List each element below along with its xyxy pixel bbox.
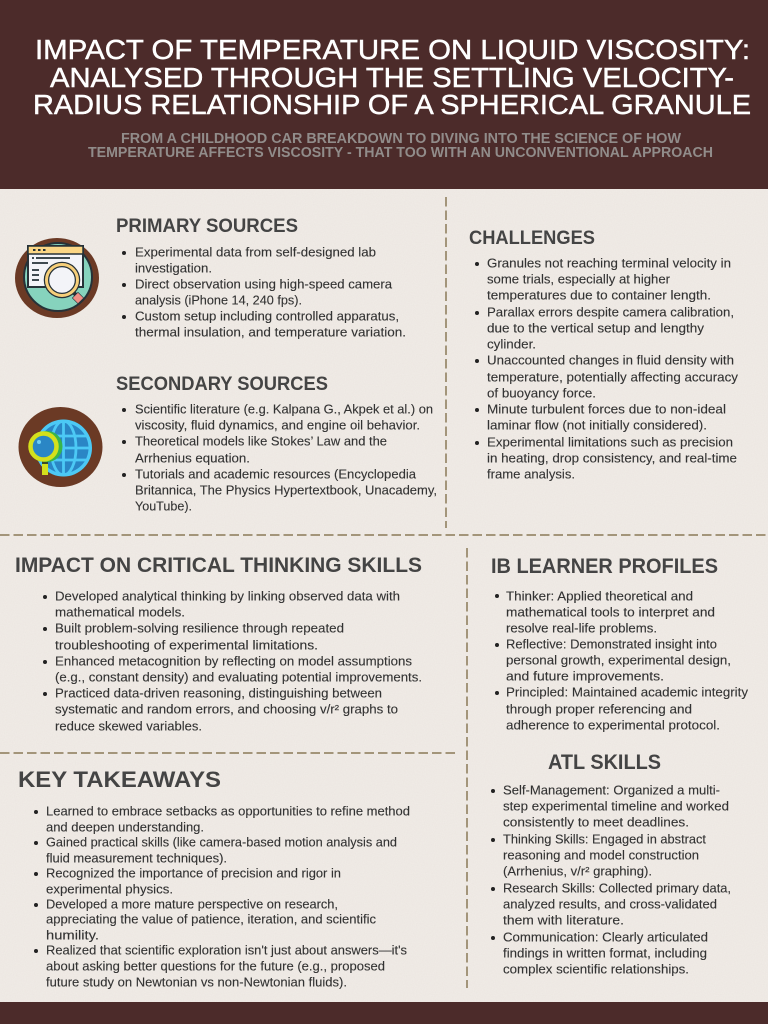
panel: challenges: [469, 227, 738, 482]
list: critical thinking: [43, 588, 422, 734]
list: IB learner profiles: mathematical tools to interpret and: [506, 604, 715, 620]
list: critical thinking: Built problem-solving resilience through repeated: [55, 620, 344, 636]
list: challenges: in heating, drop consistency, and real-time: [487, 450, 737, 466]
list: key takeaways: future study on Newtonian vs non-Newtonian fluids).: [46, 974, 347, 990]
list: challenges: temperatures due to container length.: [487, 288, 711, 302]
list: secondary sources: Arrhenius equation.: [135, 450, 250, 466]
list: ATL skills: Self-Management: Organized a multi-: [503, 782, 720, 798]
list: challenges: Unaccounted changes in fluid density with: [487, 352, 734, 368]
list: challenges: temperature, potentially affecting accuracy: [487, 370, 738, 384]
title: RADIUS RELATIONSHIP OF A SPHERICAL GRANULE: [33, 89, 751, 120]
title: [33, 34, 751, 120]
list: key takeaways: about asking better questions for the future (e.g., proposed: [46, 958, 385, 974]
list: challenges: Granules not reaching terminal velocity in: [487, 256, 731, 270]
list: ATL skills: findings in written format, including: [503, 946, 707, 960]
list: ATL skills: Communication: Clearly articulated: [503, 930, 708, 944]
list: key takeaways: humility.: [46, 928, 99, 942]
panel: secondary sources: [116, 373, 437, 514]
list: key takeaways: Recognized the importance of precision and rigor in: [46, 866, 341, 880]
list: critical thinking: troubleshooting of experimental limitations.: [55, 638, 318, 652]
list: IB learner profiles: adherence to experimental protocol.: [506, 718, 720, 732]
list: ATL skills: reasoning and model construction: [503, 848, 699, 862]
list: IB learner profiles: Reflective: Demonstrated insight into: [506, 636, 717, 652]
list: key takeaways: Developed a more mature perspective on research,: [46, 896, 338, 912]
heading: key takeaways: KEY TAKEAWAYS: [18, 767, 221, 792]
icon: globe with magnifying glass: [18, 407, 102, 487]
list: ATL skills: them with literature.: [503, 912, 624, 928]
heading: ATL skills: ATL SKILLS: [548, 750, 661, 774]
list: primary sources: Direct observation using high-speed camera: [135, 276, 393, 292]
list: primary sources: Experimental data from self-designed lab: [135, 244, 376, 260]
list: key takeaways: fluid measurement techniques).: [46, 850, 227, 866]
list: primary sources: [122, 244, 406, 340]
list: IB learner profiles: Thinker: Applied theoretical and: [506, 588, 693, 604]
heading: critical thinking: IMPACT ON CRITICAL THINKING SKILLS: [15, 553, 422, 577]
list: challenges: Parallax errors despite camera calibration,: [487, 304, 734, 320]
list: challenges: [475, 256, 738, 482]
list: key takeaways: Realized that scientific exploration isn't just about answers—it's: [46, 942, 407, 958]
subtitle: TEMPERATURE AFFECTS VISCOSITY - THAT TOO WITH AN UNCONVENTIONAL APPROACH: [88, 145, 713, 161]
list: IB learner profiles: Principled: Maintained academic integrity: [506, 684, 748, 700]
list: secondary sources: Theoretical models like Stokes’ Law and the: [135, 434, 387, 448]
list: IB learner profiles: resolve real-life problems.: [506, 620, 657, 636]
list: key takeaways: Gained practical skills (like camera-based motion analysis and: [46, 834, 397, 850]
list: challenges: laminar flow (not initially considered).: [487, 418, 707, 432]
list: IB learner profiles: through proper referencing and: [506, 702, 692, 716]
heading: primary sources: PRIMARY SOURCES: [116, 215, 298, 237]
list: key takeaways: experimental physics.: [46, 882, 173, 896]
list: critical thinking: mathematical models.: [55, 604, 185, 620]
list: IB learner profiles: personal growth, experimental design,: [506, 652, 731, 668]
list: ATL skills: Thinking Skills: Engaged in abstract: [503, 832, 706, 846]
footer band: [0, 1002, 768, 1024]
list: IB learner profiles: [495, 588, 748, 732]
subtitle: [88, 131, 713, 161]
panel: impact on critical thinking skills: [15, 553, 422, 734]
title: IMPACT OF TEMPERATURE ON LIQUID VISCOSITY:: [35, 34, 750, 65]
list: critical thinking: Developed analytical thinking by linking observed data with: [55, 588, 400, 604]
list: key takeaways: appreciating the value of patience, iteration, and scientific: [46, 912, 376, 926]
list: secondary sources: Tutorials and academic resources (Encyclopedia: [135, 466, 417, 482]
list: critical thinking: reduce skewed variables.: [55, 718, 202, 734]
list: key takeaways: [34, 804, 410, 990]
list: primary sources: investigation.: [135, 260, 212, 276]
panel: key takeaways: [18, 767, 410, 990]
list: ATL skills: step experimental timeline and worked: [503, 798, 729, 814]
list: secondary sources: [122, 402, 437, 514]
list: secondary sources: YouTube).: [135, 498, 192, 514]
heading: challenges: CHALLENGES: [469, 227, 595, 249]
list: ATL skills: Research Skills: Collected primary data,: [503, 880, 731, 896]
list: secondary sources: viscosity, fluid dynamics, and engine oil behavior.: [135, 418, 420, 432]
list: primary sources: Custom setup including controlled apparatus,: [135, 308, 399, 324]
list: critical thinking: systematic and random errors, and choosing v/r² graphs to: [55, 702, 398, 716]
list: ATL skills: (Arrhenius, v/r² graphing).: [503, 864, 652, 878]
panel: primary sources: [116, 215, 406, 340]
list: critical thinking: (e.g., constant density) and evaluating potential improvements.: [55, 670, 422, 684]
header band: [0, 0, 768, 189]
list: primary sources: analysis (iPhone 14, 240 fps).: [135, 292, 302, 308]
panel: ATL skills: [491, 750, 731, 976]
list: key takeaways: Learned to embrace setbacks as opportunities to refine method: [46, 804, 410, 818]
list: ATL skills: complex scientific relationships.: [503, 962, 689, 976]
list: critical thinking: Practiced data-driven reasoning, distinguishing between: [55, 686, 382, 700]
heading: IB learner profiles: IB LEARNER PROFILES: [491, 554, 718, 578]
list: critical thinking: Enhanced metacognition by reflecting on model assumptions: [55, 654, 412, 668]
list: ATL skills: [491, 782, 731, 976]
list: ATL skills: analyzed results, and cross-validated: [503, 896, 717, 912]
list: primary sources: thermal insulation, and temperature variation.: [135, 324, 406, 340]
panel: IB learner profiles: [491, 554, 748, 732]
list: secondary sources: Scientific literature (e.g. Kalpana G., Akpek et al.) on: [135, 402, 433, 416]
list: challenges: due to the vertical setup and lengthy: [487, 320, 704, 336]
list: challenges: frame analysis.: [487, 466, 575, 482]
heading: secondary sources: SECONDARY SOURCES: [116, 373, 328, 395]
title: ANALYSED THROUGH THE SETTLING VELOCITY-: [50, 62, 734, 93]
list: challenges: Experimental limitations such as precision: [487, 434, 733, 450]
list: ATL skills: consistently to meet deadlines.: [503, 814, 689, 830]
list: secondary sources: Britannica, The Physics Hypertextbook, Unacademy,: [135, 482, 437, 498]
list: challenges: Minute turbulent forces due to non-ideal: [487, 402, 726, 416]
list: challenges: cylinder.: [487, 336, 536, 352]
subtitle: FROM A CHILDHOOD CAR BREAKDOWN TO DIVING INTO THE SCIENCE OF HOW: [121, 131, 681, 147]
list: IB learner profiles: and future improvements.: [506, 668, 664, 684]
list: challenges: of buoyancy force.: [487, 386, 596, 400]
list: challenges: some trials, especially at higher: [487, 272, 671, 286]
list: key takeaways: and deepen understanding.: [46, 820, 204, 834]
icon: document under magnifying glass: [15, 238, 99, 318]
